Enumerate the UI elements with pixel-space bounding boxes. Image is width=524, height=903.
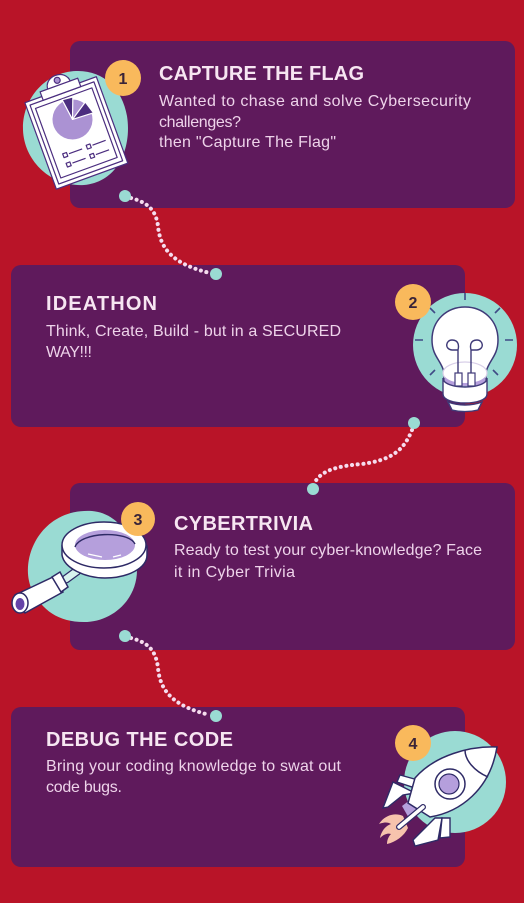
badge: 3 — [121, 502, 155, 536]
text: cybertrivia description — [174, 542, 482, 581]
text: cybertrivia description: Ready to test your cyber-knowledge? Face — [174, 542, 482, 559]
badge: 4: 4 — [409, 736, 418, 753]
heading: ideathon: IDEATHON — [46, 293, 157, 315]
connector: step 2 to 3 — [307, 417, 420, 495]
text: capture the flag description: Wanted to chase and solve Cybersecurity — [159, 93, 471, 110]
badge: 2: 2 — [409, 295, 418, 312]
panel: capture the flag — [70, 41, 515, 208]
icon: magnifying glass — [12, 511, 147, 622]
badge: 1 — [105, 60, 141, 96]
badge: 4 — [395, 725, 431, 761]
panel: cybertrivia — [70, 483, 515, 650]
panel: debug the code — [11, 707, 465, 867]
text: capture the flag description: then "Capture The Flag" — [159, 134, 336, 151]
icon: rocket — [379, 731, 506, 846]
text: capture the flag description — [159, 93, 471, 151]
text: debug the code description — [46, 758, 342, 796]
heading: capture the flag: CAPTURE THE FLAG — [159, 63, 364, 85]
panel: ideathon — [11, 265, 465, 427]
connector: step 3 to 4 — [119, 630, 222, 722]
connector: step 1 to 2 — [119, 190, 222, 280]
text: capture the flag description: challenges? — [159, 114, 241, 131]
text: ideathon description: Think, Create, Build - but in a SECURED — [46, 323, 341, 340]
text: ideathon description: WAY!!! — [46, 344, 92, 361]
text: debug the code description: Bring your coding knowledge to swat out — [46, 758, 342, 775]
text: cybertrivia description: it in Cyber Trivia — [174, 564, 295, 581]
badge: 3: 3 — [134, 512, 143, 529]
heading: debug the code: DEBUG THE CODE — [46, 729, 233, 751]
icon: clipboard — [20, 62, 128, 189]
text: ideathon description — [46, 323, 341, 361]
text: debug the code description: code bugs. — [46, 779, 122, 796]
badge: 2 — [395, 284, 431, 320]
heading: cybertrivia: CYBERTRIVIA — [174, 513, 313, 535]
badge: 1: 1 — [119, 71, 128, 88]
icon: light bulb — [413, 293, 517, 412]
